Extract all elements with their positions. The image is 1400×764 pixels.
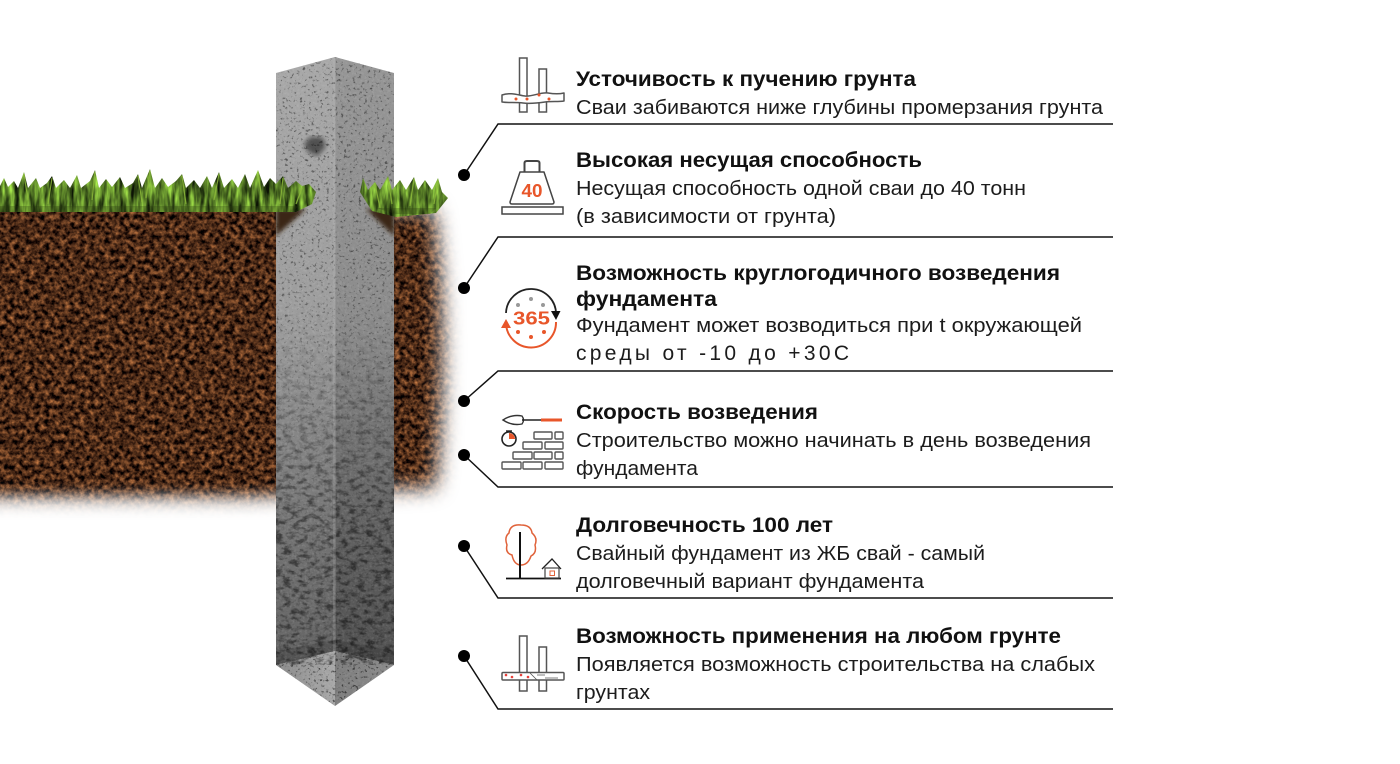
heading 3: фундамента [576,288,717,311]
text 6 [576,654,1095,704]
heading 1: Усточивость к пучению грунта [576,68,916,91]
text 4: фундамента [576,458,699,480]
heading 6: Возможность применения на любом грунте [576,625,1061,648]
heading 2: Высокая несущая способность [576,149,922,172]
concrete pile [276,57,394,706]
text 5: Свайный фундамент из ЖБ свай - самый [576,543,985,565]
text 3 [576,315,1082,365]
text 1: Сваи забиваются ниже глубины промерзания грунта [576,97,1104,119]
text 2: Несущая способность одной сваи до 40 тонн [576,178,1026,200]
heading 4: Скорость возведения [576,401,818,424]
text 6: Появляется возможность строительства на слабых [576,654,1095,676]
text 4 [576,430,1091,480]
heading 3 [576,262,1060,311]
pile faces [276,57,335,665]
text 3: Фундамент может возводиться при t окружающей [576,315,1082,337]
icon: piles in heaving soil [502,58,564,112]
text: (в зависимости от грунта) [576,206,836,228]
icon: 40 ton weight [502,161,563,214]
grass [0,169,448,217]
icon: 365 days cycle: 365 [513,308,550,328]
callout dots [458,169,470,662]
icon: 40 ton weight: 40 [522,181,542,201]
soil hugging pile at ground line [276,209,394,236]
icon: tree and house [506,525,561,578]
text 5 [576,543,985,593]
text 4: Строительство можно начинать в день возведения [576,430,1091,452]
concrete texture [276,57,394,704]
icon: piles in weak soil [502,636,564,691]
text 5: долговечный вариант фундамента [576,571,925,593]
pile tip [276,651,394,706]
heading 5: Долговечность 100 лет [576,514,833,537]
heading 3: Возможность круглогодичного возведения [576,262,1060,285]
text 3: среды от -10 до +30С [576,342,849,365]
text 6: грунтах [576,682,650,704]
icon: trowel, stopwatch and bricks [502,416,563,469]
icon: 365 days cycle [501,289,560,347]
soil cross-section [0,190,470,520]
callout lines [464,124,1113,709]
